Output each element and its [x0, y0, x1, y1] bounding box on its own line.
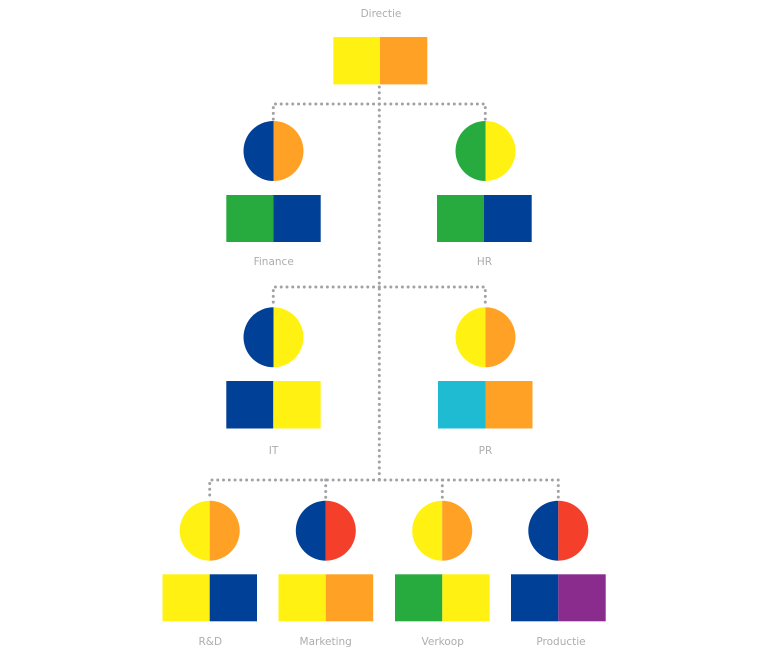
node: Directie: Directie: [361, 8, 401, 20]
node: HR: HR: [477, 256, 492, 268]
node: HR: [437, 121, 532, 268]
dotted connectors: [210, 87, 558, 500]
node: Directie: [333, 8, 427, 84]
node: Finance: Finance: [254, 256, 294, 268]
node: IT: IT: [269, 445, 279, 457]
node: IT: [226, 307, 321, 457]
node: PR: [438, 307, 532, 457]
node: R&D: [162, 501, 257, 648]
node: Verkoop: Verkoop: [422, 636, 464, 648]
node: Productie: Productie: [536, 636, 586, 648]
node: R&D: R&D: [199, 636, 222, 648]
node: PR: PR: [479, 445, 492, 457]
node: Finance: [226, 121, 321, 268]
node: Verkoop: [395, 501, 490, 648]
node: Marketing: Marketing: [300, 636, 352, 648]
node: Marketing: [278, 501, 373, 648]
node: Productie: [511, 501, 606, 648]
